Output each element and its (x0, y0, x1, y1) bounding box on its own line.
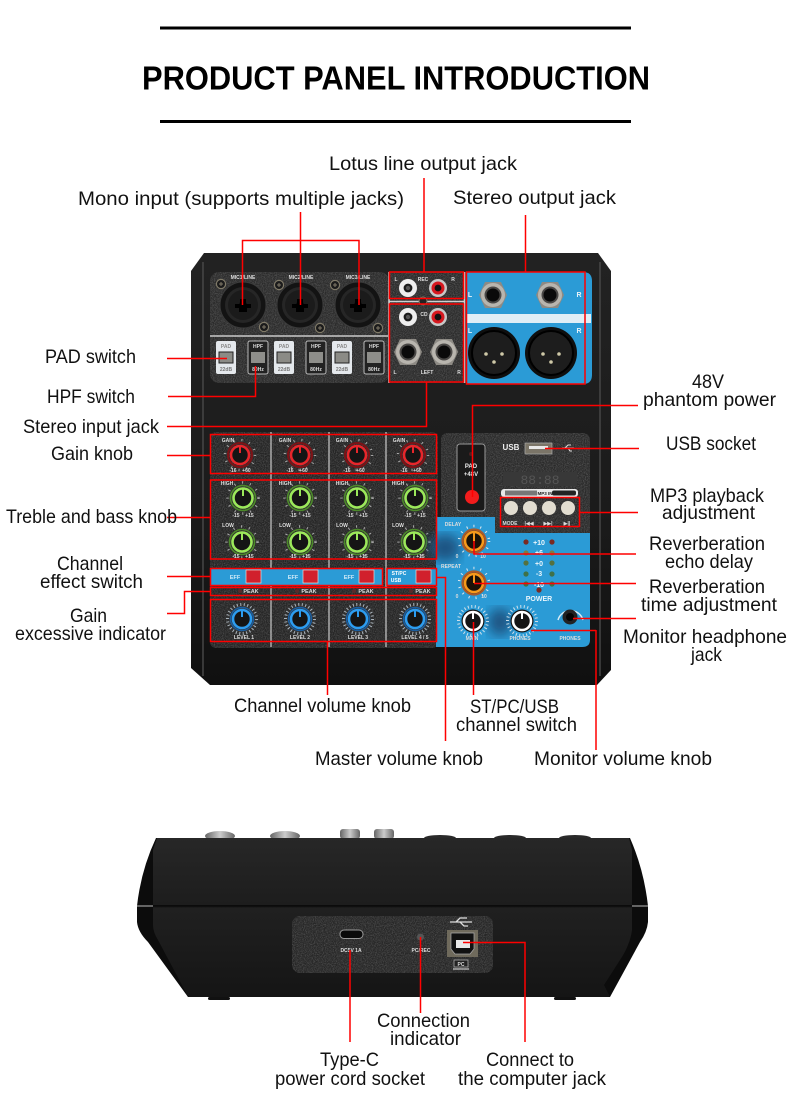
gain knobs (222, 438, 428, 474)
labels: right: 48V (692, 371, 724, 393)
bass knobs: LOW (392, 523, 404, 529)
labels: left (6, 346, 177, 645)
reverb knobs: 0 (456, 594, 459, 600)
LED meter: +0 (535, 561, 543, 568)
gain knobs: GAIN (393, 438, 406, 444)
labels: left: Gain (70, 605, 107, 627)
effect switches: EFF (288, 575, 299, 581)
level knobs: LEVEL 1 (234, 635, 254, 641)
treble knobs: -15 +15 (232, 513, 254, 519)
level knobs (228, 604, 430, 641)
reverb knobs: DELAY (445, 522, 462, 528)
PAD and HPF switches: PAD (279, 344, 289, 350)
level knobs: LEVEL 2 (290, 635, 310, 641)
bass knobs (222, 523, 430, 560)
labels: bottom of top panel: Master volume knob (315, 748, 483, 770)
labels: right: time adjustment (641, 594, 778, 616)
labels: left: Stereo input jack (23, 416, 159, 438)
LED meter: -3 (536, 571, 542, 578)
level knobs: LEVEL 3 (348, 635, 368, 641)
labels: back view: indicator (390, 1028, 461, 1050)
labels: right: Reverberation (649, 576, 765, 598)
labels: right: Monitor headphone (623, 626, 787, 648)
labels: bottom of top panel: ST/PC/USB (470, 696, 559, 718)
main and phones knobs: PHONES (509, 636, 531, 642)
MP3 controls: |◀◀ (524, 521, 534, 527)
treble knobs: HIGH (336, 481, 349, 487)
panel: stereo output (466, 272, 592, 384)
level knobs: LEVEL 4 / 5 (401, 635, 429, 641)
PAD and HPF switches: 22dB (278, 367, 290, 373)
USB socket: USB (503, 443, 520, 452)
panel: line jacks: R (451, 277, 455, 283)
gain knobs: GAIN (222, 438, 235, 444)
LED meter: -10 (534, 582, 544, 589)
treble knobs: -15 +15 (289, 513, 311, 519)
mixer body (191, 253, 611, 685)
peak indicators: PEAK (243, 589, 259, 595)
PAD and HPF switches: PAD (221, 344, 231, 350)
MP3 controls: ▶|| (563, 521, 571, 527)
labels: left: effect switch (40, 571, 143, 593)
panel: master section (429, 433, 590, 647)
labels: back view: Connection (377, 1010, 470, 1032)
LED meter: POWER (526, 596, 552, 603)
labels: top: Stereo output jack (453, 187, 616, 209)
gain knobs: GAIN (336, 438, 349, 444)
phantom power switch (457, 444, 485, 511)
LED meter: +10 (533, 540, 545, 547)
panel: microphone inputs: MIC2/LINE (289, 275, 314, 281)
title (142, 26, 650, 123)
labels: back view (275, 1010, 606, 1090)
treble knobs: HIGH (392, 481, 405, 487)
reverb knobs: 10 (480, 554, 486, 560)
peak indicators: PEAK (301, 589, 317, 595)
treble knobs: -15 +15 (346, 513, 368, 519)
PAD and HPF switches: 80Hz (368, 367, 380, 373)
panel: line jacks: CD (420, 312, 428, 318)
MP3 controls: ▶▶| (542, 521, 553, 527)
panel: line jacks: L (394, 277, 398, 283)
gain knobs: -16 +60 (343, 468, 365, 474)
gain knobs: -16 +60 (229, 468, 251, 474)
back connector panel (292, 916, 493, 973)
top connectors (205, 829, 591, 841)
reverb knobs: 10 (481, 594, 487, 600)
labels: bottom of top panel (234, 695, 712, 770)
gain knobs: -16 +60 (400, 468, 422, 474)
connection LED: PC/REC (412, 948, 431, 954)
labels: right: adjustment (662, 502, 756, 524)
peak indicators: PEAK (415, 589, 431, 595)
labels: left: Treble and bass knob (6, 506, 177, 528)
reverb knobs (441, 522, 489, 600)
peak indicators: PEAK (358, 589, 374, 595)
reverb knobs: 0 (456, 554, 459, 560)
PAD and HPF switches (216, 341, 384, 374)
USB-B socket (447, 918, 478, 969)
labels: back view: power cord socket (275, 1068, 426, 1090)
effect switches: EFF (230, 575, 241, 581)
USB socket (503, 443, 574, 454)
USB-C socket: DC5V 1A (340, 948, 362, 954)
LED display (503, 472, 577, 488)
labels: right: jack (690, 644, 722, 666)
phantom power switch: +48V (464, 472, 478, 478)
panel: line jacks (389, 272, 464, 383)
bass knobs: LOW (222, 523, 234, 529)
effect switches: EFF (344, 575, 355, 581)
panel: stereo output: R (576, 292, 582, 299)
labels: right: Reverberation (649, 533, 765, 555)
MP3 controls: MP3 IN (537, 491, 553, 496)
labels: bottom of top panel: Channel volume knob (234, 695, 411, 717)
red callout lines: back view (350, 937, 525, 1042)
labels: right: phantom power (643, 389, 776, 411)
labels: bottom of top panel: Monitor volume knob (534, 748, 712, 770)
panel: channel strips (210, 432, 438, 648)
panel: microphone inputs: MIC3/LINE (346, 275, 371, 281)
labels: right (623, 371, 787, 666)
PAD and HPF switches: HPF (253, 344, 263, 350)
labels: top (78, 153, 616, 210)
labels: top: Mono input (supports multiple jacks) (78, 188, 404, 210)
effect switches: USB (391, 578, 402, 584)
headphone jack (558, 610, 583, 642)
phantom power switch: PAD (465, 464, 478, 470)
bass knobs: -15 +15 (289, 554, 311, 560)
panel: line jacks: LEFT (421, 370, 433, 376)
panel: line jacks: R (457, 370, 461, 376)
effect switches: ST/PC (392, 571, 407, 577)
LED meter: +6 (535, 550, 543, 557)
panel: stereo output: R (576, 328, 582, 335)
gain knobs: GAIN (279, 438, 292, 444)
LED meter (523, 539, 555, 603)
peak indicators (238, 589, 431, 595)
labels: right: echo delay (665, 551, 753, 573)
MP3 controls (501, 489, 578, 527)
gain knobs: -16 +60 (286, 468, 308, 474)
back body (137, 838, 648, 997)
labels: back view: Type-C (320, 1049, 379, 1071)
labels: bottom of top panel: channel switch (456, 714, 577, 736)
PAD and HPF switches: 22dB (336, 367, 348, 373)
effect switches (211, 568, 437, 585)
labels: left: Gain knob (51, 443, 133, 465)
main and phones knobs (458, 606, 536, 642)
labels: top: Lotus line output jack (329, 153, 517, 175)
panel: line jacks: L (393, 370, 397, 376)
bass knobs: -15 +15 (232, 554, 254, 560)
USB-C socket (340, 930, 363, 954)
labels: right: USB socket (666, 433, 757, 455)
panel: microphone inputs (210, 272, 389, 383)
PAD and HPF switches: HPF (369, 344, 379, 350)
MP3 controls: MODE (502, 521, 518, 527)
bass knobs: -15 +15 (346, 554, 368, 560)
labels: right: MP3 playback (650, 485, 764, 507)
red callout lines: top panel (167, 178, 639, 750)
panel: stereo output: L (468, 328, 473, 335)
reverb knobs: REPEAT (441, 564, 461, 570)
labels: back view: the computer jack (458, 1068, 606, 1090)
PAD and HPF switches: 80Hz (252, 367, 264, 373)
title: PRODUCT PANEL INTRODUCTION (142, 60, 650, 96)
mixer top panel (191, 253, 611, 685)
panel: stereo output: L (468, 292, 473, 299)
USB-B socket: PC (458, 962, 465, 968)
labels: left: Channel (57, 553, 123, 575)
treble knobs: HIGH (221, 481, 234, 487)
treble knobs: -15 +15 (404, 513, 426, 519)
headphone jack: PHONES (559, 636, 581, 642)
bass knobs: LOW (336, 523, 348, 529)
PAD and HPF switches: HPF (311, 344, 321, 350)
PAD and HPF switches: 80Hz (310, 367, 322, 373)
treble knobs: HIGH (279, 481, 292, 487)
panel: microphone inputs: MIC1/LINE (231, 275, 256, 281)
LED display: 88:88 (520, 473, 560, 488)
bass knobs: -15 +15 (403, 554, 425, 560)
treble knobs (221, 481, 430, 519)
main and phones knobs: MAIN (466, 636, 479, 642)
connection LED (412, 934, 431, 954)
panel: line jacks: REC (418, 277, 429, 283)
bass knobs: LOW (279, 523, 291, 529)
PAD and HPF switches: PAD (337, 344, 347, 350)
labels: back view: Connect to (486, 1049, 574, 1071)
mixer back view (137, 829, 648, 1000)
labels: left: HPF switch (47, 386, 135, 408)
PAD and HPF switches: 22dB (220, 367, 232, 373)
labels: left: PAD switch (45, 346, 136, 368)
labels: left: excessive indicator (15, 623, 166, 645)
